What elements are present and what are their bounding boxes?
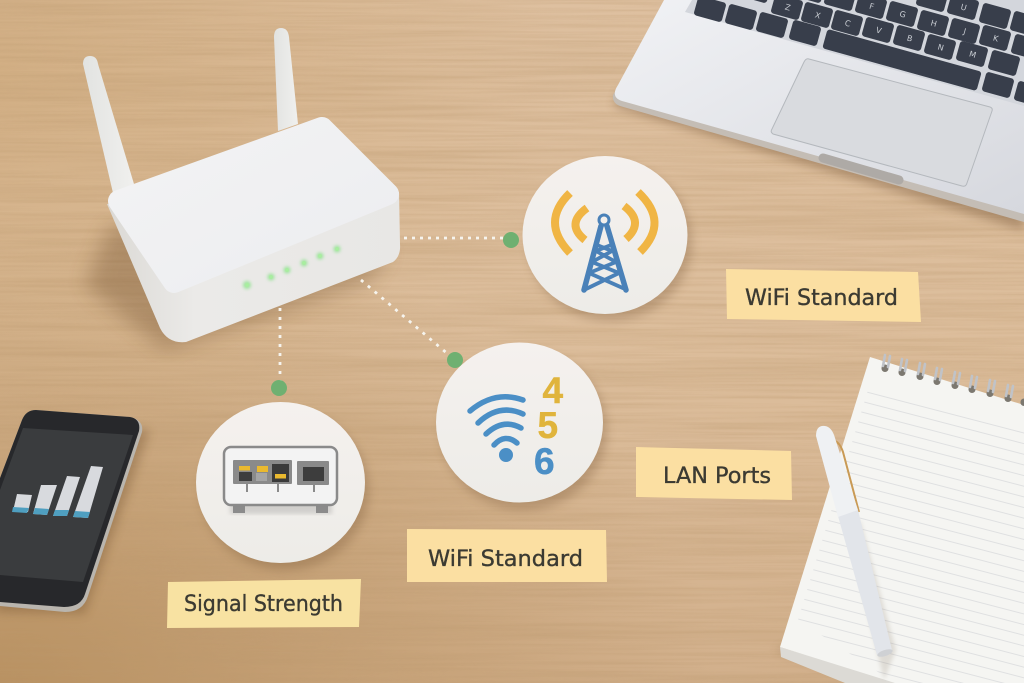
key letters: G [898, 9, 907, 20]
router shadow [85, 225, 390, 350]
key letters: C [844, 19, 852, 29]
key letters [784, 2, 1000, 60]
connector: router to ports [279, 308, 281, 382]
panel: tower disc [522, 156, 692, 321]
label: Signal Strength [167, 579, 361, 628]
notepad [775, 355, 1024, 683]
label: WiFi Standard (lower): WiFi Standard [428, 547, 583, 572]
trackpad [771, 59, 992, 186]
key letters: K [992, 34, 1000, 44]
icon: wifi arcs [470, 397, 523, 462]
panel: wifi standards disc [436, 342, 607, 510]
laptop keys [693, 0, 1024, 108]
wifi generations: 4 [542, 370, 564, 411]
key letters: V [875, 26, 883, 36]
connector node: tower [503, 232, 519, 248]
left antenna [83, 56, 134, 193]
wifi generations: 5 [538, 405, 558, 446]
pen barrel [838, 510, 892, 655]
key letters: J [961, 27, 967, 36]
phone screen [0, 428, 133, 582]
label: WiFi Standard (tower) [726, 269, 921, 322]
label: LAN Ports: LAN Ports [663, 464, 771, 489]
label: WiFi Standard (lower) [407, 529, 607, 582]
router body [107, 192, 400, 342]
right antenna [274, 28, 298, 131]
panel: ports disc [196, 402, 369, 570]
signal bars [12, 466, 103, 518]
key letters: N [937, 42, 945, 53]
router top face [119, 128, 388, 282]
key letters: F [868, 2, 875, 12]
router with antennas [83, 28, 400, 342]
pen cap [816, 426, 858, 517]
pen clip [835, 441, 859, 512]
key letters: M [968, 49, 977, 60]
label: WiFi Standard (tower): WiFi Standard [745, 286, 898, 311]
label: LAN Ports [636, 447, 792, 500]
connector: router to tower [404, 237, 505, 239]
connector: router to wifi standard [361, 280, 449, 355]
wifi generations [534, 370, 564, 482]
ruled lines [798, 390, 1024, 683]
pen [816, 426, 896, 680]
key letters: H [930, 18, 938, 29]
status LEDs [243, 246, 340, 289]
laptop notch [823, 158, 899, 180]
wifi generations: 6 [534, 441, 555, 482]
icon: radio tower [584, 215, 626, 290]
key letters: X [814, 11, 822, 21]
key letters: U [960, 2, 968, 13]
key letters: Z [784, 3, 792, 13]
icon: ports device [224, 447, 337, 514]
connector node: wifi standard [447, 352, 463, 368]
connector node: ports [271, 380, 287, 396]
spiral binding [883, 355, 1024, 402]
phone [0, 410, 150, 614]
laptop [613, 0, 1024, 230]
icon: signal arcs [555, 192, 655, 253]
key letters: B [906, 34, 914, 44]
label: Signal Strength: Signal Strength [184, 592, 343, 617]
